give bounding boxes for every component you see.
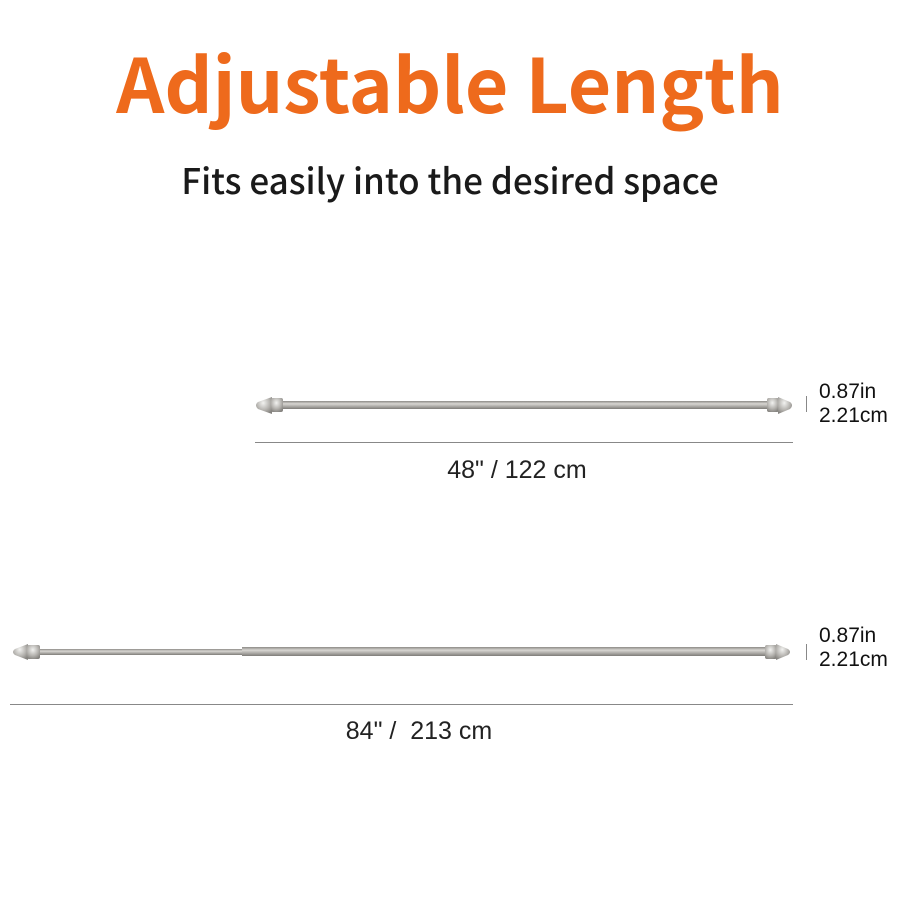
left finial [256, 397, 283, 414]
right finial [767, 397, 792, 414]
diameter ticks [806, 396, 808, 412]
label: long length: 84" / 213 cm [346, 717, 492, 745]
dimension line long [10, 704, 793, 706]
label: diameter 2: 0.87in [819, 624, 876, 647]
label: diameter 2: 2.21cm [819, 648, 888, 671]
label: diameter 2 [819, 624, 888, 671]
left finial [13, 644, 40, 660]
label: short length: 48" / 122 cm [447, 456, 587, 484]
subtitle: Fits easily into the desired space [181, 154, 719, 205]
dimension line short [255, 442, 793, 444]
short rod [256, 397, 792, 414]
label: diameter 1: 2.21cm [819, 404, 888, 427]
label: diameter 1: 0.87in [819, 380, 876, 403]
right finial [765, 644, 790, 660]
long rod [13, 644, 790, 660]
label: diameter 1 [819, 380, 888, 427]
title: Adjustable Length [116, 26, 784, 135]
